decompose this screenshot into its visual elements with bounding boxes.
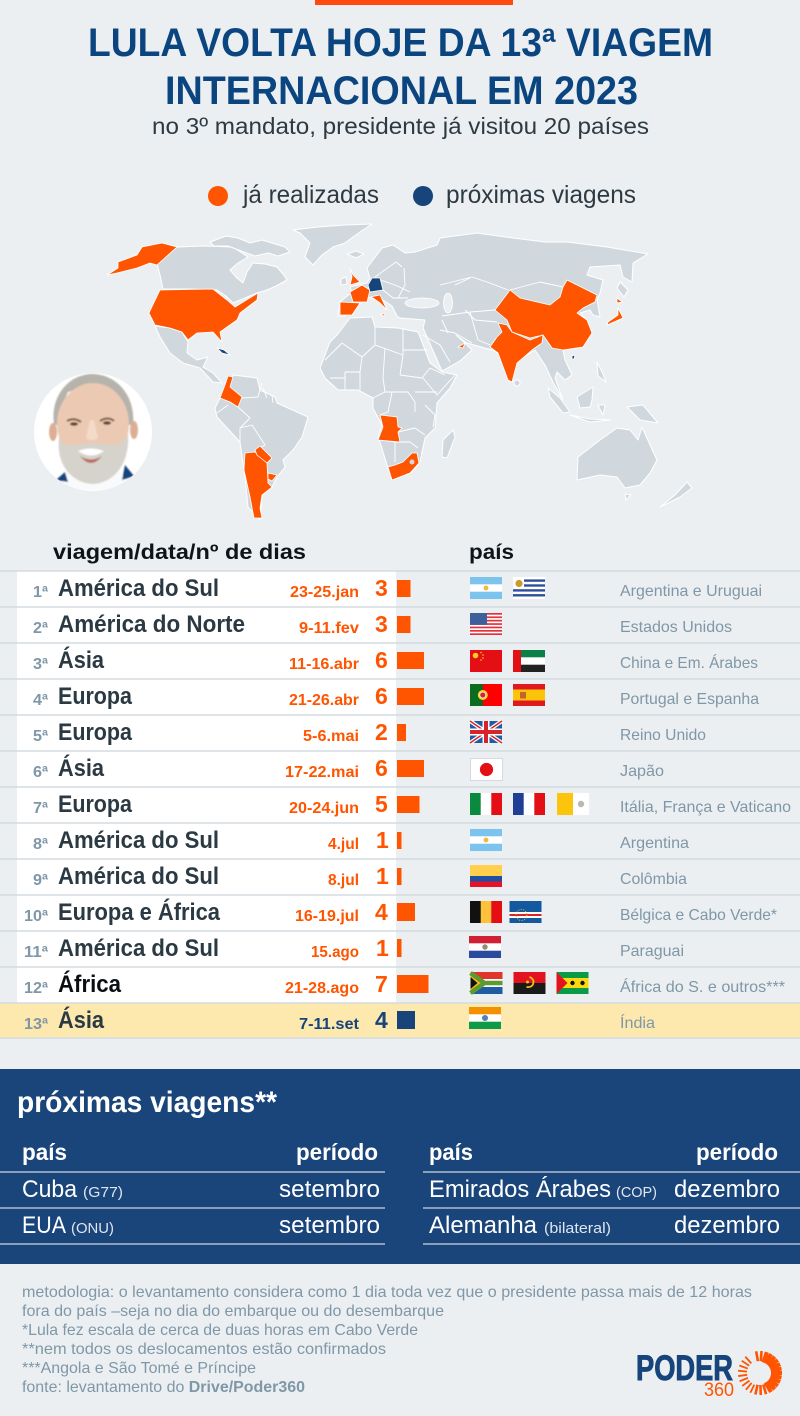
row 8: 8ª xyxy=(33,836,48,853)
row 11 xyxy=(24,935,684,962)
title: LULA VOLTA HOJE DA 13ª VIAGEM xyxy=(88,21,713,65)
table background rows xyxy=(0,571,800,1038)
footnotes xyxy=(22,1284,752,1396)
right upcoming trips table: período xyxy=(696,1139,778,1165)
row 1 xyxy=(33,575,762,602)
logo: Poder360: PODER xyxy=(636,1349,733,1388)
row 4: 21-26.abr xyxy=(289,692,359,709)
subtitle: no 3º mandato, presidente já visitou 20 países xyxy=(152,113,649,139)
right upcoming trips table: Alemanha xyxy=(429,1212,538,1239)
right upcoming trips table: país xyxy=(429,1139,473,1165)
row 10: 16-19.jul xyxy=(295,908,359,925)
row 8 xyxy=(33,827,689,854)
row 9: América do Sul xyxy=(58,863,219,890)
row 3: 3ª xyxy=(33,656,48,673)
left upcoming trips table: setembro xyxy=(279,1176,380,1203)
row 13 highlighted xyxy=(24,1006,655,1034)
left upcoming trips table xyxy=(0,1139,385,1244)
row 5: 5ª xyxy=(33,728,48,745)
row 5 xyxy=(33,719,706,746)
row 2: 3 xyxy=(375,611,388,637)
row 7: 5 xyxy=(375,791,388,817)
row 5: 5-6.mai xyxy=(303,728,359,745)
row 12 xyxy=(24,970,785,998)
row 12: África do S. e outros*** xyxy=(620,977,785,996)
table column headers xyxy=(53,541,514,564)
row 2: América do Norte xyxy=(58,611,245,638)
footnotes: fonte: levantamento do Drive/Poder360 xyxy=(22,1379,305,1396)
row 4: 6 xyxy=(375,683,388,709)
row 12: 12ª xyxy=(24,980,48,997)
row 10 xyxy=(24,898,777,926)
row 8: Argentina xyxy=(620,835,689,852)
row 3: 6 xyxy=(375,647,388,673)
left upcoming trips table: EUA xyxy=(22,1212,66,1239)
row 9 xyxy=(33,863,687,890)
row 10: 10ª xyxy=(24,908,48,925)
row 4: Portugal e Espanha xyxy=(620,691,759,708)
row 11: 11ª xyxy=(24,944,48,961)
row 12: África xyxy=(58,970,122,998)
row 10: Bélgica e Cabo Verde* xyxy=(620,907,777,924)
legend: já realizadas xyxy=(242,181,379,209)
row 7: 7ª xyxy=(33,800,48,817)
right upcoming trips table: Emirados Árabes xyxy=(429,1176,611,1203)
row 9: 8.jul xyxy=(328,872,359,889)
row 3: 11-16.abr xyxy=(289,656,359,673)
left upcoming trips table: setembro xyxy=(279,1212,380,1239)
row 11: Paraguai xyxy=(620,943,684,960)
row 6: 6 xyxy=(375,755,388,781)
logo: Poder360: 360 xyxy=(704,1380,734,1401)
row 8: 1 xyxy=(376,827,389,853)
right upcoming trips table xyxy=(423,1139,800,1244)
world map xyxy=(107,224,692,520)
row 13 highlighted: 4 xyxy=(375,1007,388,1033)
row 3 xyxy=(33,646,758,674)
row 1: 23-25.jan xyxy=(290,584,359,601)
panel: próximas viagens xyxy=(0,1069,800,1264)
row 2: 2ª xyxy=(33,620,48,637)
row 6: 17-22.mai xyxy=(285,764,359,781)
row 8: 4.jul xyxy=(328,836,359,853)
row 1: 3 xyxy=(375,575,388,601)
left upcoming trips table: país xyxy=(22,1139,67,1165)
row 2: Estados Unidos xyxy=(620,619,732,636)
row 4 xyxy=(33,683,759,710)
left upcoming trips table: período xyxy=(296,1139,378,1165)
table column headers: viagem/data/nº de dias xyxy=(53,541,306,564)
row 10: 4 xyxy=(375,899,388,925)
left upcoming trips table: (G77) xyxy=(83,1184,123,1201)
row 13 highlighted: 13ª xyxy=(24,1016,48,1033)
panel heading: próximas viagens** xyxy=(17,1086,277,1119)
legend: próximas viagens xyxy=(446,181,636,209)
left upcoming trips table: Cuba xyxy=(22,1176,78,1203)
row 4: Europa xyxy=(58,683,133,710)
footnotes: *Lula fez escala de cerca de duas horas em Cabo Verde xyxy=(22,1322,418,1339)
title: INTERNACIONAL EM 2023 xyxy=(165,69,638,113)
row 7: 20-24.jun xyxy=(289,800,359,817)
row 8: América do Sul xyxy=(58,827,219,854)
row 6: Japão xyxy=(620,763,664,780)
row 12: 7 xyxy=(375,971,388,997)
row 6 xyxy=(33,754,664,782)
footnotes: ***Angola e São Tomé e Príncipe xyxy=(22,1360,256,1377)
row 2: 9-11.fev xyxy=(299,620,359,637)
row 11: 15.ago xyxy=(311,944,359,961)
row 7 xyxy=(33,791,791,818)
row 13 highlighted: Índia xyxy=(620,1013,655,1032)
title xyxy=(88,21,713,113)
footnotes: metodologia: o levantamento considera como 1 dia toda vez que o presidente passa mais de 12 horas xyxy=(22,1284,752,1301)
row 6: 6ª xyxy=(33,764,48,781)
table column headers: país xyxy=(469,541,514,564)
portrait of Lula xyxy=(34,373,152,491)
right upcoming trips table: (bilateral) xyxy=(544,1220,611,1237)
row 1: 1ª xyxy=(33,584,48,601)
right upcoming trips table: dezembro xyxy=(674,1212,780,1239)
row 5: Reino Unido xyxy=(620,727,706,744)
row 7: Europa xyxy=(58,791,133,818)
row 5: Europa xyxy=(58,719,133,746)
footnotes: **nem todos os deslocamentos estão confirmados xyxy=(22,1341,386,1358)
row 5: 2 xyxy=(375,719,388,745)
row 12: 21-28.ago xyxy=(285,980,359,997)
row 3: Ásia xyxy=(58,646,105,674)
row 9: Colômbia xyxy=(620,871,687,888)
row 13 highlighted: 7-11.set xyxy=(299,1016,360,1033)
row 11: América do Sul xyxy=(58,935,219,962)
right upcoming trips table: dezembro xyxy=(674,1176,780,1203)
left upcoming trips table: (ONU) xyxy=(71,1220,114,1237)
row 13 highlighted: Ásia xyxy=(58,1006,105,1034)
footnotes: fora do país –seja no dia do embarque ou do desembarque xyxy=(22,1303,444,1320)
row 9: 9ª xyxy=(33,872,48,889)
row 1: América do Sul xyxy=(58,575,219,602)
row 10: Europa e África xyxy=(58,898,221,926)
row 11: 1 xyxy=(376,935,389,961)
legend xyxy=(208,181,636,209)
row 4: 4ª xyxy=(33,692,48,709)
row 3: China e Em. Árabes xyxy=(620,653,758,672)
row 1: Argentina e Uruguai xyxy=(620,583,762,600)
row 2 xyxy=(33,611,732,638)
right upcoming trips table: (COP) xyxy=(616,1184,657,1201)
row 7: Itália, França e Vaticano xyxy=(620,799,791,816)
row 6: Ásia xyxy=(58,754,105,782)
row 9: 1 xyxy=(376,863,389,889)
logo: Poder360 xyxy=(636,1349,782,1401)
